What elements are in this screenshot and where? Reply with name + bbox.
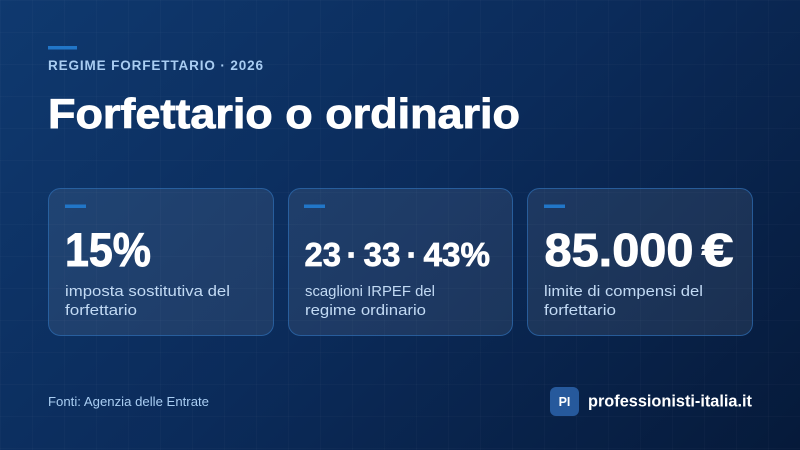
value: 23 · 33 · 43%: 43% bbox=[424, 236, 490, 273]
panel: imposta 15% bbox=[48, 188, 274, 336]
panel: limite compensi bbox=[528, 188, 752, 336]
description: card 3: limite di compensi del bbox=[544, 283, 703, 300]
value: 85.000 €: 85.000 bbox=[544, 224, 694, 276]
accent bar: card 3 bbox=[544, 204, 565, 208]
description: card 2: regime ordinario bbox=[305, 302, 426, 319]
value: 23 · 33 · 43%: 23 bbox=[304, 236, 341, 273]
description: card 3: forfettario bbox=[544, 302, 616, 319]
accent bar: header bbox=[48, 46, 77, 50]
value: 23 · 33 · 43%: · bbox=[406, 236, 418, 273]
title: Forfettario o ordinario bbox=[48, 90, 520, 137]
accent bar: card 1 bbox=[65, 204, 86, 208]
accent bar: card 2 bbox=[304, 204, 325, 208]
value: 23 · 33 · 43%: 33 bbox=[364, 236, 400, 273]
value: 15%: 15% bbox=[65, 223, 151, 276]
logo badge: PI bbox=[559, 395, 570, 409]
value: 23 · 33 · 43%: · bbox=[346, 236, 358, 273]
brand name: professionisti-italia.it bbox=[588, 392, 752, 410]
value: 85.000 €: € bbox=[702, 224, 734, 276]
description: card 1: forfettario bbox=[65, 302, 137, 319]
panel: scaglioni IRPEF bbox=[288, 188, 512, 336]
description: card 2: scaglioni IRPEF del bbox=[305, 283, 435, 300]
eyebrow label: REGIME FORFETTARIO · 2026 bbox=[48, 58, 263, 73]
source note: Fonti: Agenzia delle Entrate bbox=[48, 394, 209, 409]
logo badge bbox=[550, 387, 579, 416]
description: card 1: imposta sostitutiva del bbox=[65, 283, 230, 300]
